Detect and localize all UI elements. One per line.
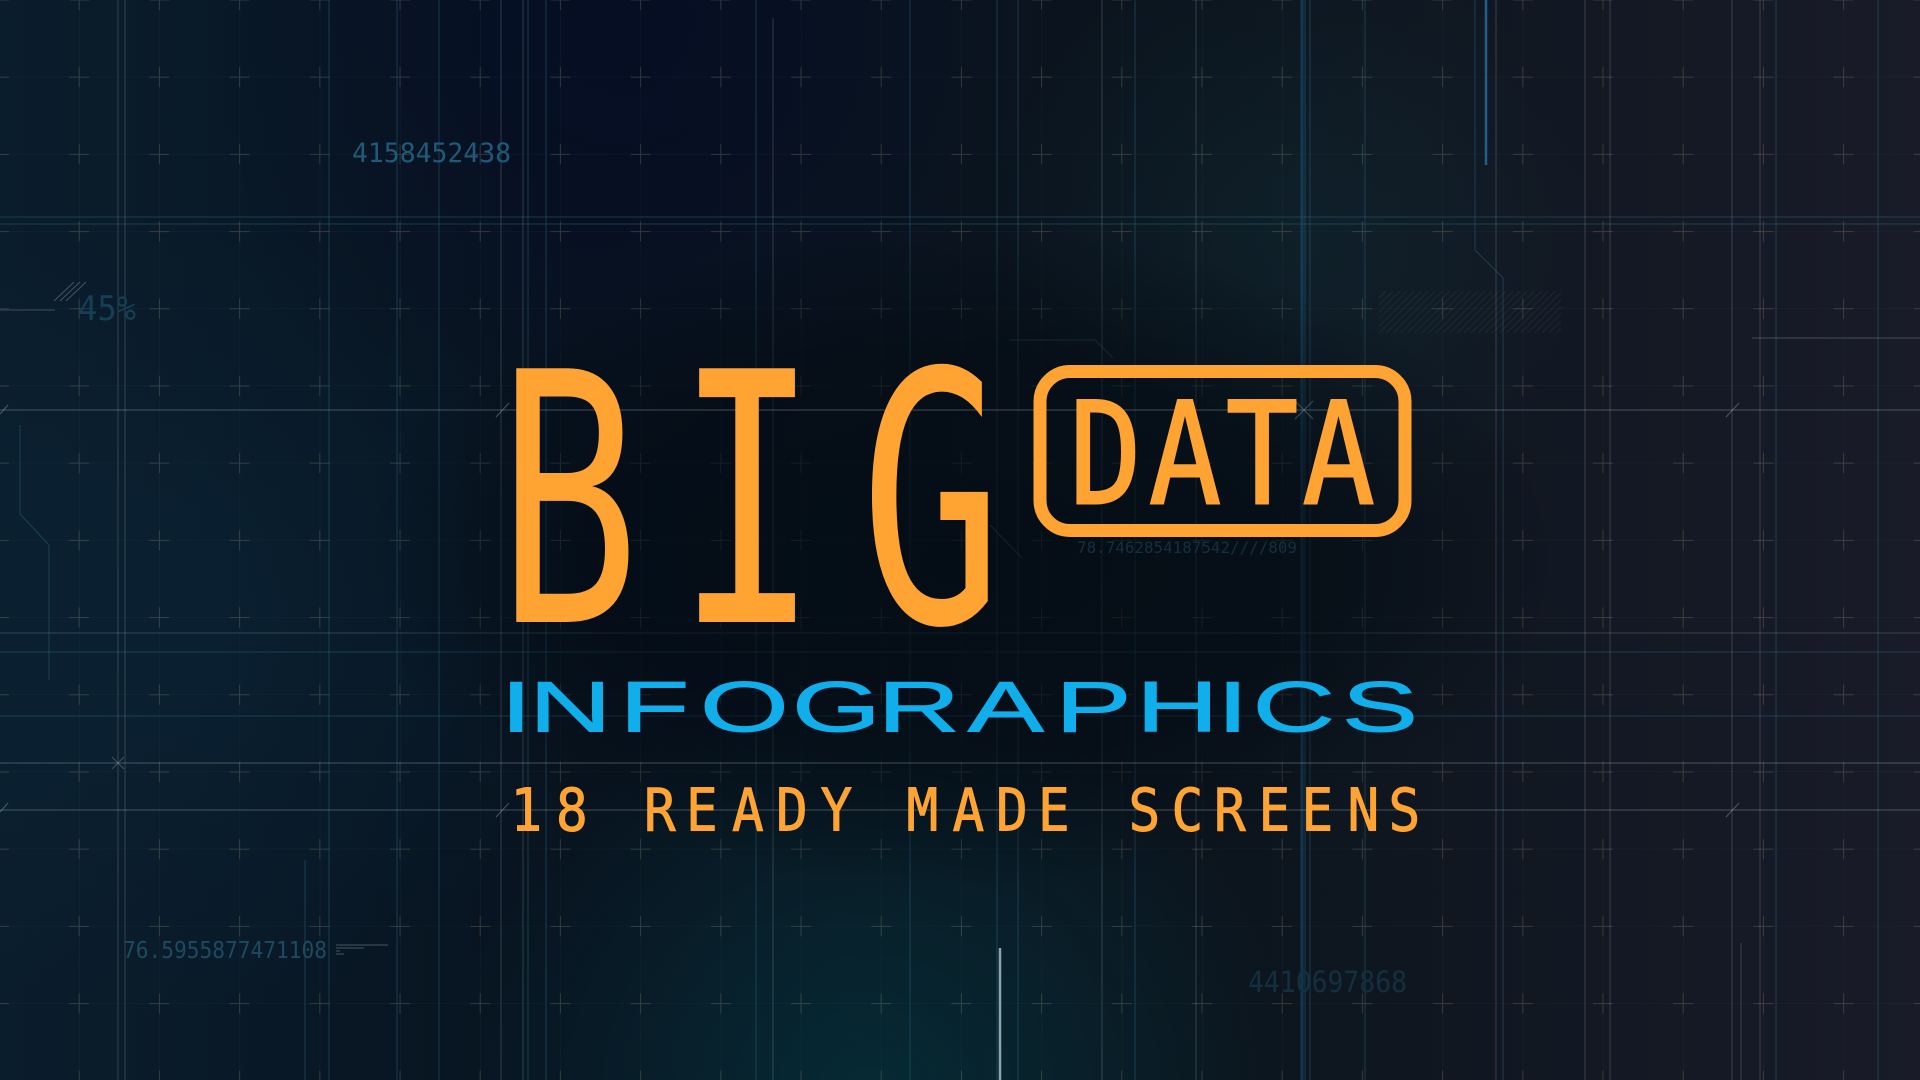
- data readout: 4410697868: 4410697868: [1248, 965, 1407, 999]
- data readout: 45%: 45%: [78, 289, 136, 329]
- tagline: 18 READY MADE SCREENS: 18 READY MADE SCREENS: [510, 777, 1420, 845]
- data readout: 76.5955877471108: 76.5955877471108: [123, 938, 327, 964]
- badge label: DATA: [1069, 373, 1375, 538]
- badge: DATA: [1040, 372, 1405, 538]
- subtitle: INFOGRAPHICS: INFOGRAPHICS: [500, 668, 1418, 747]
- badge outline: [1040, 372, 1405, 530]
- data readout: 78.7462854187542////809: 78.7462854187542////809: [1077, 538, 1297, 557]
- data readout: 4158452438: 4158452438: [352, 138, 511, 169]
- heading: BIG: BIG: [497, 300, 1003, 705]
